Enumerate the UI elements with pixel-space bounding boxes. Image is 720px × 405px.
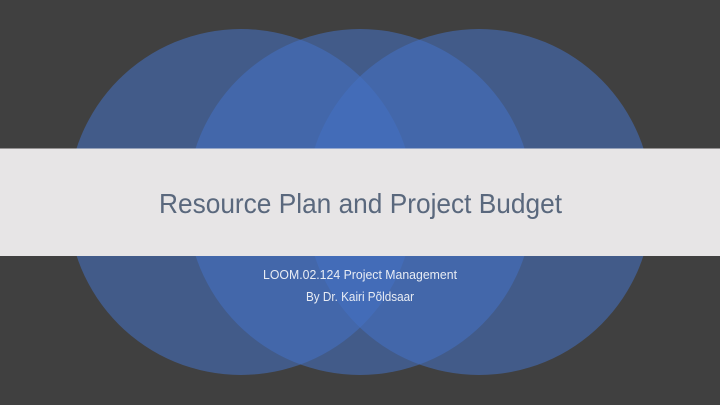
title band bbox=[0, 148, 720, 256]
overlapping circles bbox=[68, 29, 652, 375]
subtitle: author: By Dr. Kairi Põldsaar bbox=[306, 290, 414, 304]
title: Resource Plan and Project Budget bbox=[159, 188, 562, 219]
subtitle: course: LOOM.02.124 Project Management bbox=[263, 268, 458, 282]
